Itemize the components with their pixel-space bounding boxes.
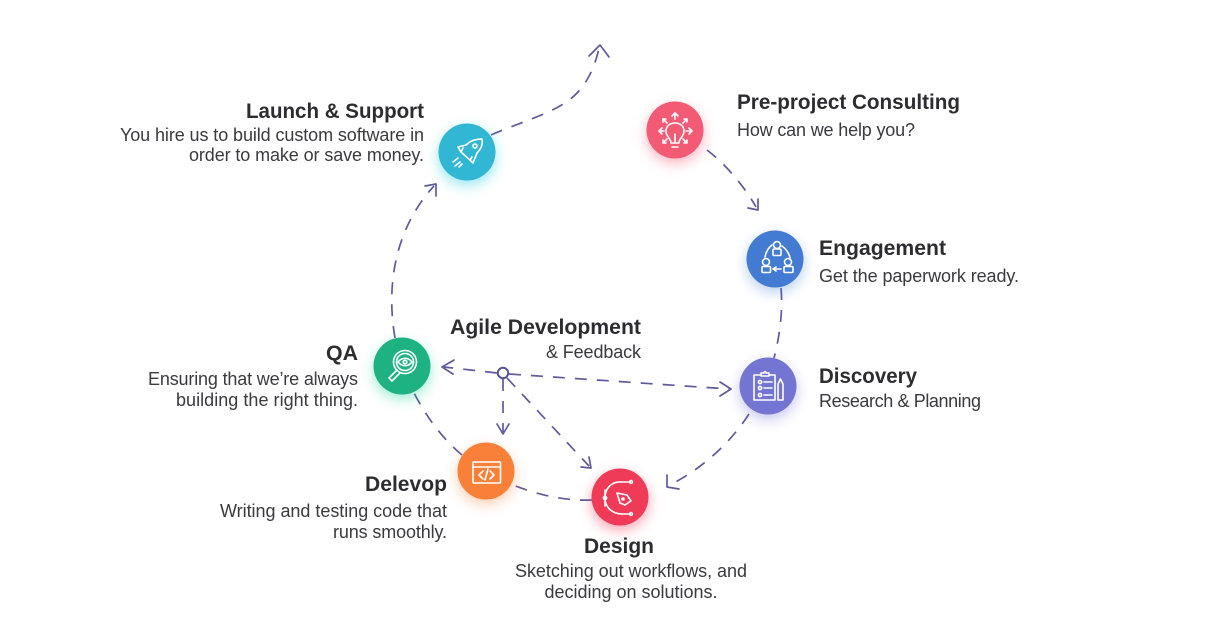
label: launch and support — [120, 100, 424, 165]
connector: design to develop — [513, 485, 592, 500]
node: design — [592, 468, 648, 530]
node: pre-project consulting — [646, 102, 704, 163]
label: agile development — [450, 316, 642, 362]
label: pre-project consulting: How can we help you? — [737, 120, 915, 140]
label: engagement — [819, 237, 1019, 286]
label: engagement: Engagement — [819, 237, 946, 260]
label: QA: Ensuring that we’re always — [148, 369, 358, 389]
icon: rocket — [453, 139, 482, 167]
icon: clipboard checklist — [754, 372, 783, 400]
label: develop: Writing and testing code that — [220, 501, 447, 521]
connector: engagement to discovery — [774, 288, 782, 358]
label: develop — [220, 473, 447, 542]
label: QA: QA — [326, 342, 358, 365]
label: launch and support: order to make or save money. — [189, 145, 424, 165]
icon: light bulb — [659, 113, 692, 147]
label: develop: runs smoothly. — [333, 522, 447, 542]
label: design: Sketching out workflows, and — [515, 561, 747, 581]
node: launch and support — [438, 124, 496, 185]
label: QA: building the right thing. — [176, 390, 358, 410]
connector: launch to exit arrow — [491, 45, 609, 135]
connector: develop to QA — [414, 393, 462, 455]
label: discovery — [819, 365, 981, 411]
node: develop — [458, 442, 514, 504]
icon: code window — [473, 462, 500, 483]
label: design — [515, 535, 747, 602]
icon: people cycle — [762, 242, 793, 272]
label: pre-project consulting: Pre-project Consulting — [737, 91, 960, 114]
label: QA — [148, 342, 358, 410]
label: design: Design — [584, 535, 654, 558]
node: discovery — [740, 358, 796, 419]
connector: discovery to design — [667, 414, 749, 489]
label: design: deciding on solutions. — [544, 582, 718, 602]
connector: pre-project to engagement — [707, 150, 758, 210]
icon: magnifier with eye — [389, 350, 416, 381]
label: develop: Delevop — [365, 473, 447, 496]
connector: QA to launch — [392, 184, 436, 338]
label: discovery: Research & Planning — [819, 391, 981, 411]
label: launch and support: Launch & Support — [246, 100, 424, 123]
node: engagement — [746, 230, 804, 292]
label: pre-project consulting — [737, 91, 960, 140]
agile hub with arrows — [442, 360, 731, 468]
label: discovery: Discovery — [819, 365, 917, 388]
label: launch and support: You hire us to build custom software in — [120, 125, 424, 145]
node: QA — [374, 338, 430, 399]
icon: bezier pen — [603, 481, 632, 515]
label: agile development: & Feedback — [546, 342, 642, 362]
label: agile development: Agile Development — [450, 316, 641, 339]
label: engagement: Get the paperwork ready. — [819, 266, 1019, 286]
